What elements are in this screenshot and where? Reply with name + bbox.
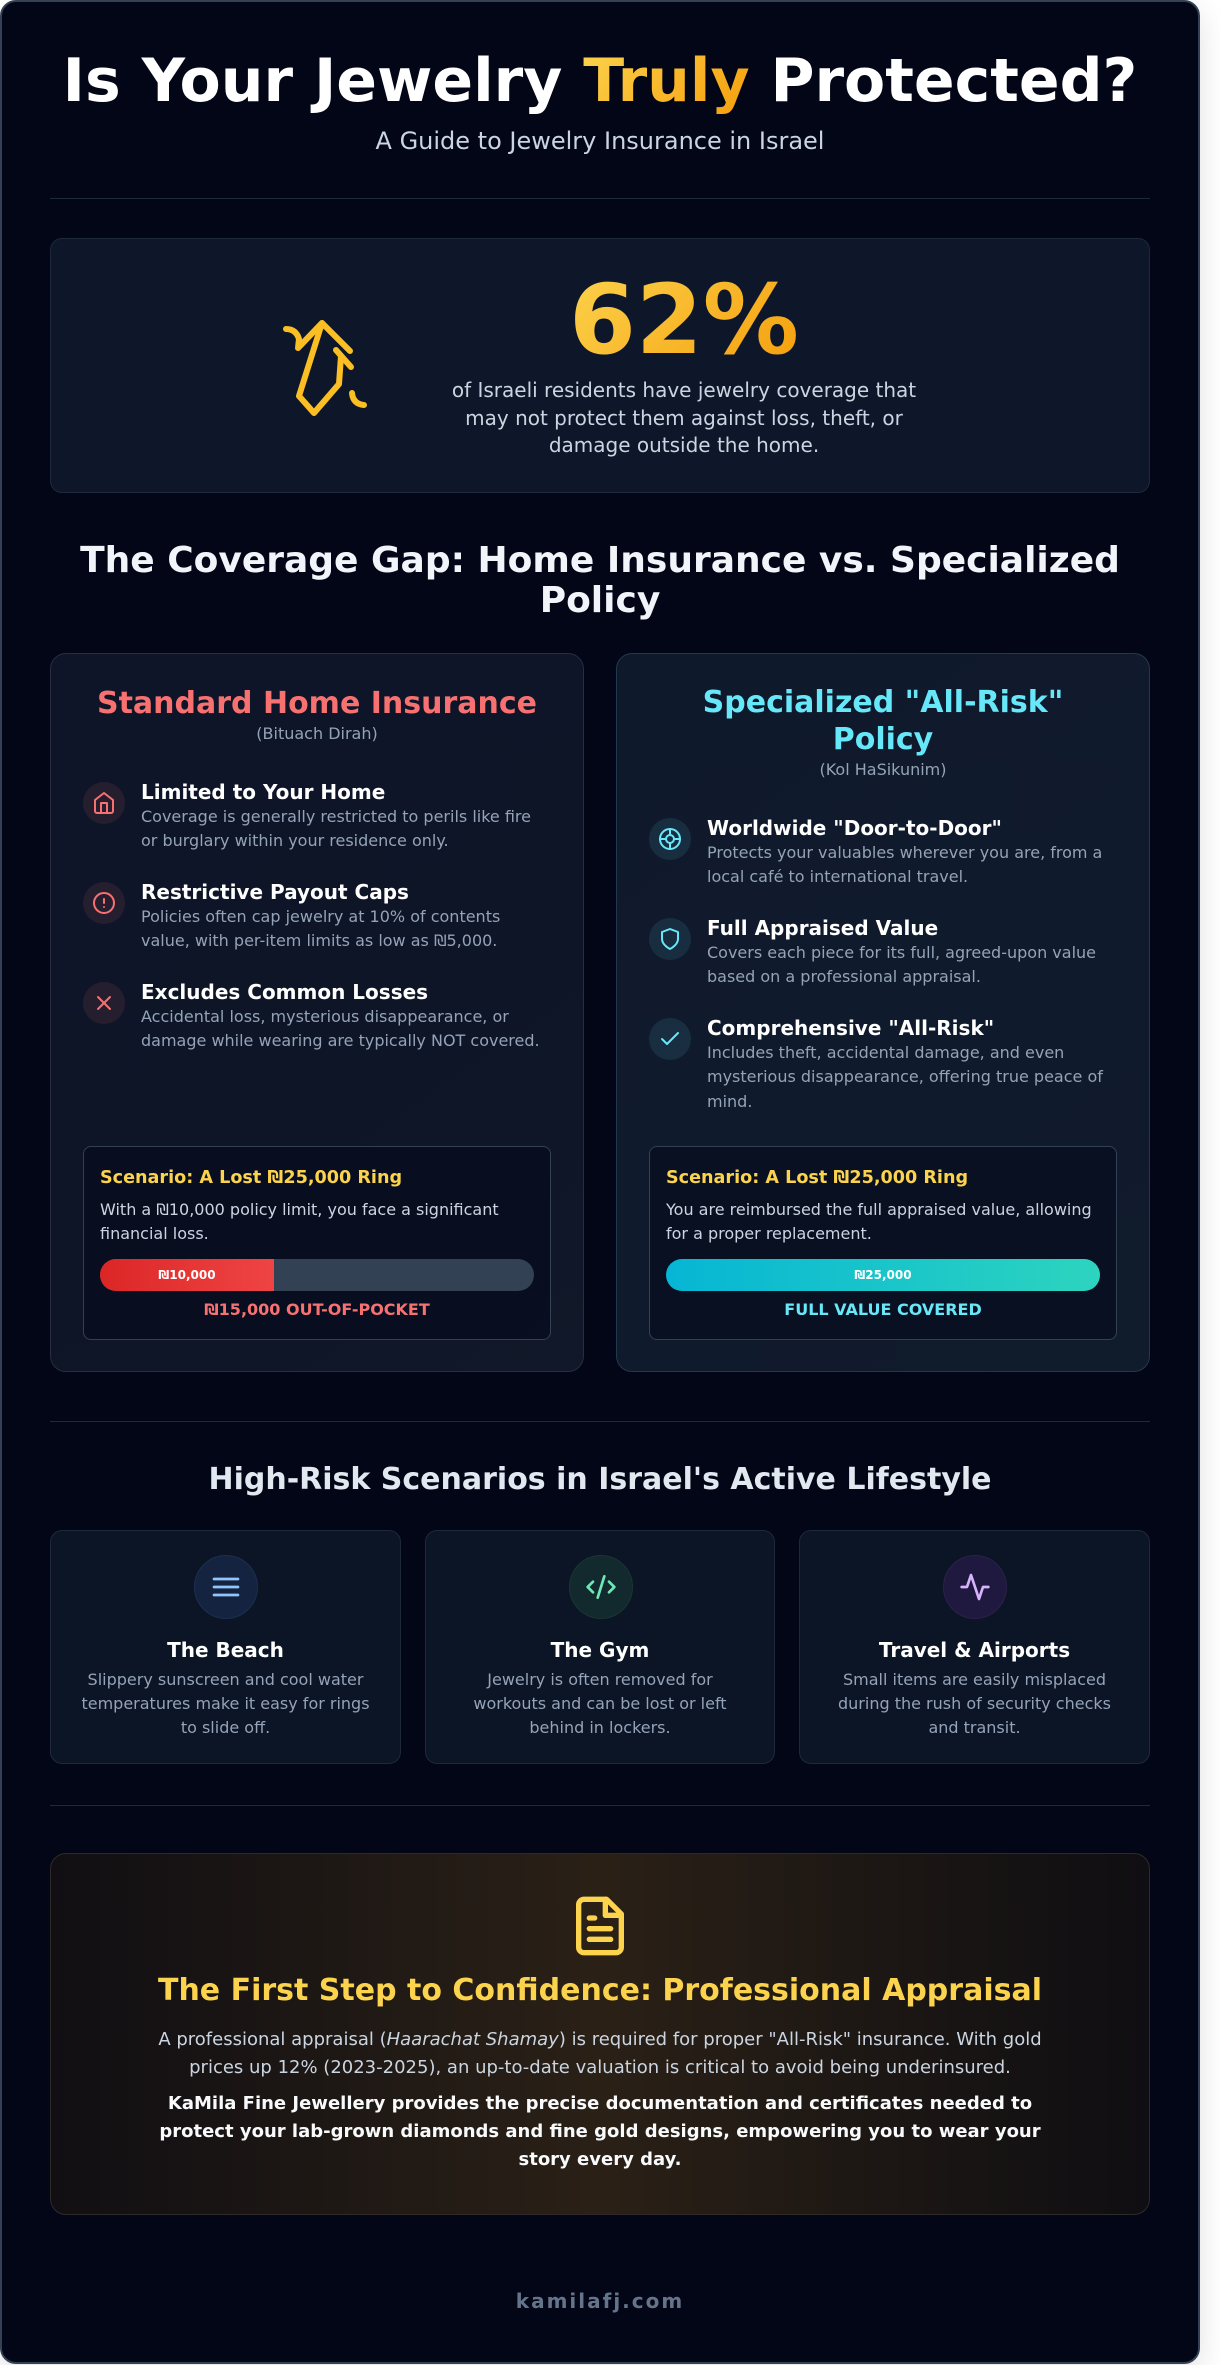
card text: workouts and can be lost or left [473, 1694, 727, 1713]
appraisal paragraph [158, 2029, 1042, 2078]
icon: waves menu [194, 1555, 258, 1619]
card subheading: Bituach Dirah: (Bituach Dirah) [256, 724, 378, 743]
scenario heading: Scenario: A Lost ₪25,000 Ring [100, 1168, 402, 1188]
item text: local café to international travel. [707, 867, 968, 886]
card subheading: Kol HaSikunim: (Kol HaSikunim) [819, 760, 947, 779]
scenario heading: Scenario: A Lost ₪25,000 Ring [666, 1168, 968, 1188]
item text [707, 1043, 1104, 1111]
appraisal paragraph: A professional appraisal (Haarachat Shamay) is required for proper "All-Risk" insurance. With gold [158, 2029, 1042, 2050]
item text [141, 907, 500, 950]
item text: Accidental loss, mysterious disappearance, or [141, 1007, 509, 1026]
full value label: FULL VALUE COVERED [784, 1300, 982, 1319]
card text: temperatures make it easy for rings [81, 1694, 370, 1713]
card title: The Beach [167, 1638, 284, 1662]
card text: Slippery sunscreen and cool water [88, 1670, 363, 1689]
item text: or burglary within your residence only. [141, 831, 449, 850]
card text: during the rush of security checks [838, 1694, 1111, 1713]
panel: 62% statistic [50, 238, 1150, 493]
item text [141, 807, 531, 850]
scenario text [666, 1200, 1092, 1243]
item text: Covers each piece for its full, agreed-upon value [707, 943, 1096, 962]
item text: damage while wearing are typically NOT covered. [141, 1031, 540, 1050]
item text [707, 943, 1096, 986]
item heading: Full Appraised Value [707, 916, 938, 940]
card text: Jewelry is often removed for [487, 1670, 713, 1689]
big number 62%: 62% [569, 264, 799, 376]
scenario text: financial loss. [100, 1224, 209, 1243]
card text: Small items are easily misplaced [843, 1670, 1106, 1689]
icon: home [83, 782, 125, 824]
scenario box: all-risk policy [649, 1146, 1117, 1340]
item text: mysterious disappearance, offering true peace of [707, 1067, 1103, 1086]
bar: 100% covered [666, 1259, 1100, 1291]
scenario text: for a proper replacement. [666, 1224, 872, 1243]
section heading: coverage gap: The Coverage Gap: Home Insurance vs. Specialized [80, 540, 1120, 581]
item: restrictive payout caps [83, 880, 500, 950]
card heading: specialized policy [703, 685, 1063, 756]
item heading: Excludes Common Losses [141, 980, 428, 1004]
item text: Protects your valuables wherever you are, from a [707, 843, 1102, 862]
KaMila statement: KaMila Fine Jewellery provides the precise documentation and certificates needed to [168, 2093, 1032, 2114]
item text: value, with per-item limits as low as ₪5,000. [141, 931, 497, 950]
panel: standard home insurance [50, 653, 584, 1372]
appraisal paragraph: prices up 12% (2023-2025), an up-to-date valuation is critical to avoid being underinsured. [189, 2057, 1011, 2078]
panel: professional appraisal call to action [50, 1853, 1150, 2215]
item text: mind. [707, 1092, 752, 1111]
icon: broken home outline [283, 320, 367, 416]
subtitle: A Guide to Jewelry Insurance in Israel [376, 127, 824, 155]
icon: document [576, 1896, 624, 1956]
item text [707, 843, 1102, 886]
bar fill: 10,000: ₪10,000 [158, 1268, 216, 1282]
KaMila statement: story every day. [518, 2149, 681, 2170]
KaMila statement: protect your lab-grown diamonds and fine gold designs, empowering you to wear your [159, 2121, 1041, 2142]
out of pocket label: ₪15,000 OUT-OF-POCKET [204, 1300, 430, 1319]
scenario text [100, 1200, 499, 1243]
item: comprehensive all-risk [649, 1016, 1104, 1111]
KaMila statement [159, 2093, 1041, 2170]
item: worldwide door-to-door [649, 816, 1102, 886]
title: Is Your Jewelry Truly Protected? [63, 46, 1137, 116]
card title: Travel & Airports [879, 1638, 1070, 1662]
item: excludes common losses [83, 980, 540, 1050]
card text: behind in lockers. [529, 1718, 671, 1737]
card text [473, 1670, 727, 1737]
card: the beach [50, 1530, 401, 1764]
item heading: Limited to Your Home [141, 780, 385, 804]
card: travel and airports [799, 1530, 1150, 1764]
card text [838, 1670, 1111, 1737]
section heading: coverage gap: Policy [540, 580, 660, 621]
scenario text: You are reimbursed the full appraised value, allowing [666, 1200, 1092, 1219]
icon: shield [649, 918, 691, 960]
section heading: high-risk scenarios: High-Risk Scenarios in Israel's Active Lifestyle [208, 1462, 992, 1497]
card title: The Gym [551, 1638, 649, 1662]
card: the gym [425, 1530, 775, 1764]
item: full appraised value [649, 916, 1096, 986]
card text: to slide off. [181, 1718, 270, 1737]
item text [141, 1007, 540, 1050]
item heading: Restrictive Payout Caps [141, 880, 409, 904]
card heading: specialized policy: Specialized "All-Risk" [703, 685, 1063, 720]
item heading: Worldwide "Door-to-Door" [707, 816, 1002, 840]
card heading: specialized policy: Policy [833, 722, 933, 756]
footer: website: kamilafj.com [516, 2289, 684, 2313]
bar fill: 10,000 [100, 1259, 274, 1291]
section heading: coverage gap [80, 540, 1120, 621]
statistic description [452, 378, 916, 457]
icon: alert [83, 882, 125, 924]
icon: check [649, 1018, 691, 1060]
icon: activity [943, 1555, 1007, 1619]
item text: Includes theft, accidental damage, and even [707, 1043, 1064, 1062]
statistic description: damage outside the home. [549, 433, 819, 457]
item text: based on a professional appraisal. [707, 967, 981, 986]
item: limited to your home [83, 780, 531, 850]
item heading: Comprehensive "All-Risk" [707, 1016, 994, 1040]
card text: and transit. [928, 1718, 1021, 1737]
panel: specialized all-risk policy [616, 653, 1150, 1372]
icon: x [83, 982, 125, 1024]
statistic description: may not protect them against loss, theft, or [465, 406, 903, 430]
item text: Coverage is generally restricted to perils like fire [141, 807, 531, 826]
item text: Policies often cap jewelry at 10% of contents [141, 907, 500, 926]
statistic description: of Israeli residents have jewelry coverage that [452, 378, 916, 402]
icon: crosshair globe [649, 818, 691, 860]
bar: 40% covered [100, 1259, 534, 1291]
icon: code [569, 1555, 633, 1619]
appraisal heading: The First Step to Confidence: Professional Appraisal [158, 1973, 1042, 2008]
bar: 100% covered: ₪25,000 [854, 1268, 912, 1282]
card heading: standard home insurance: Standard Home Insurance [97, 686, 537, 721]
scenario text: With a ₪10,000 policy limit, you face a significant [100, 1200, 499, 1219]
card text [81, 1670, 370, 1737]
scenario box: standard policy [83, 1146, 551, 1340]
